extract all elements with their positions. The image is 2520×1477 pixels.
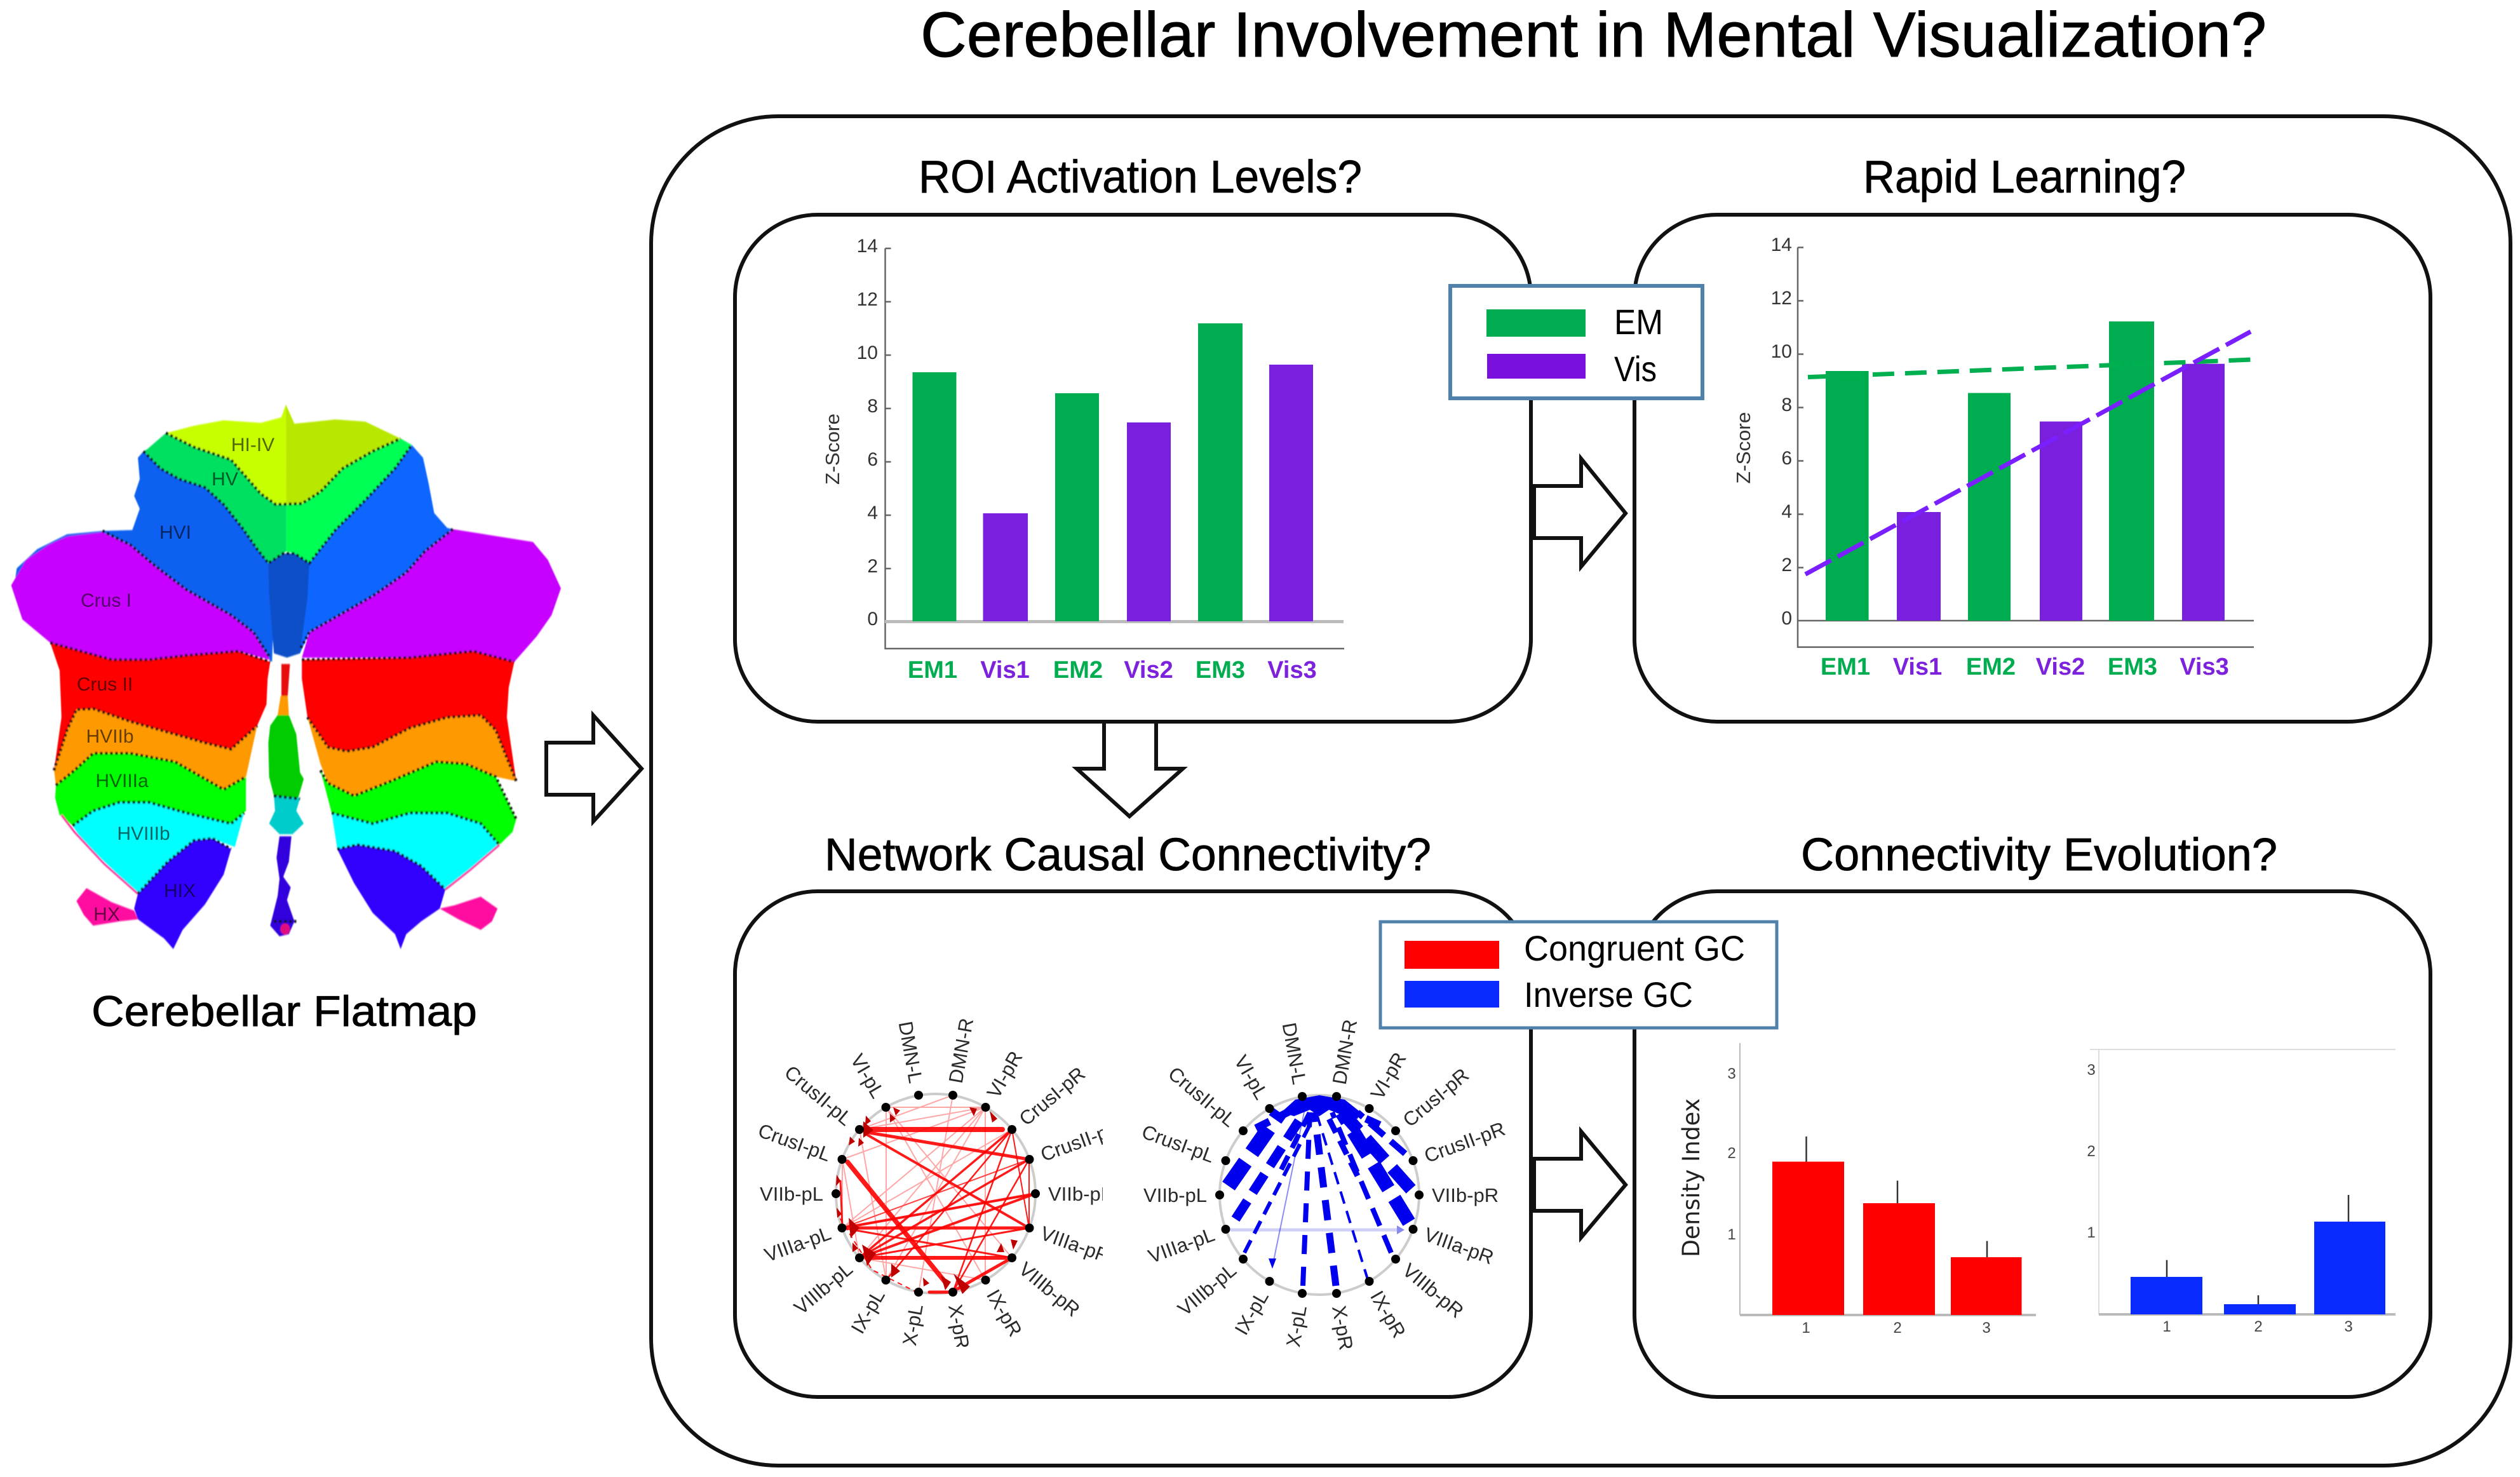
bar chart: congruent density index: 3 bbox=[1727, 1065, 1736, 1082]
bar chart: congruent density index: 1 bbox=[1802, 1319, 1810, 1337]
bar chart: ROI activation z-scores: 2 bbox=[867, 556, 878, 577]
arrow: flatmap to panels bbox=[546, 715, 642, 821]
ring labels: inverse GC: VI-pR bbox=[1366, 1049, 1411, 1103]
lobule HVIIIb bbox=[72, 802, 499, 894]
ring labels: congruent GC: IX-pL bbox=[847, 1286, 889, 1337]
lobule HVIIIa bbox=[55, 753, 516, 845]
pink lobule fringe bbox=[62, 815, 499, 894]
bar chart with trend lines: 12 bbox=[1771, 288, 1792, 309]
arrow: network to evolution bbox=[1534, 1131, 1626, 1238]
lobule HI-IV bbox=[166, 405, 401, 504]
vermis: central blue bbox=[268, 553, 309, 658]
flatmap labels: Crus II bbox=[77, 674, 133, 695]
bar chart with trend lines: 6 bbox=[1781, 448, 1792, 469]
panel: connectivity evolution bbox=[1634, 830, 2430, 1397]
ring labels: congruent GC: DMN-L bbox=[894, 1020, 927, 1085]
bar chart with trend lines: Vis3 bbox=[2180, 654, 2229, 680]
ring labels: congruent GC: VI-pR bbox=[983, 1048, 1027, 1102]
bar chart with trend lines: EM1 bbox=[1821, 654, 1870, 680]
bar chart: ROI activation z-scores: 4 bbox=[867, 502, 878, 523]
bar chart with trend lines bbox=[1732, 234, 2254, 680]
ring labels: congruent GC: CrusI-pR bbox=[1015, 1062, 1089, 1130]
bar chart with trend lines: 8 bbox=[1781, 395, 1792, 415]
bar chart: ROI activation z-scores: 0 bbox=[867, 609, 878, 630]
arrow: ROI to rapid learning bbox=[1534, 459, 1626, 567]
ring labels: inverse GC: DMN-R bbox=[1328, 1018, 1361, 1086]
bar chart: inverse density index: 1 bbox=[2162, 1318, 2171, 1335]
bar chart: ROI activation z-scores: Vis3 bbox=[1267, 657, 1317, 684]
lobule Crus II bbox=[50, 643, 516, 781]
bar chart: congruent density index: 1 bbox=[1727, 1226, 1736, 1243]
flatmap labels: HVIIIb bbox=[117, 823, 170, 844]
heading: ROI activation levels: ROI Activation Levels? bbox=[919, 152, 1362, 203]
legend: EM / Vis: EM bbox=[1614, 302, 1663, 342]
dotted lobule boundaries bbox=[50, 433, 516, 921]
ring nodes: inverse GC bbox=[1215, 1092, 1424, 1298]
ring labels: congruent GC: CrusII-pL bbox=[780, 1061, 856, 1130]
ring labels: inverse GC: IX-pL bbox=[1230, 1287, 1273, 1339]
panel: outer container bbox=[651, 116, 2510, 1466]
bar chart: inverse density index: 2 bbox=[2087, 1143, 2096, 1160]
bar chart: inverse density index: 3 bbox=[2087, 1062, 2096, 1079]
chart: congruent GC connectivity ring bbox=[755, 1016, 1124, 1351]
trend line: EM bbox=[1808, 360, 2253, 377]
bar chart with trend lines: Vis1 bbox=[1893, 654, 1942, 680]
bar chart with trend lines: 10 bbox=[1771, 341, 1792, 362]
ring labels: inverse GC: VIIb-pR bbox=[1432, 1184, 1499, 1206]
lobule HVI fringe and hemispheres bbox=[15, 445, 453, 662]
bar chart: ROI activation z-scores: 12 bbox=[857, 289, 878, 310]
heading: connectivity evolution: Connectivity Evolution? bbox=[1801, 830, 2277, 880]
bar chart: ROI activation z-scores: 8 bbox=[867, 396, 878, 417]
legend: congruent / inverse GC bbox=[1380, 922, 1777, 1028]
legend: congruent / inverse GC: Inverse GC bbox=[1524, 975, 1693, 1015]
vermis segments bbox=[268, 664, 304, 936]
bar chart with trend lines: 0 bbox=[1781, 608, 1792, 629]
caption: cerebellar flatmap: Cerebellar Flatmap bbox=[91, 987, 477, 1035]
bar chart: inverse density index: 3 bbox=[2344, 1318, 2353, 1335]
heading: network causal connectivity: Network Causal Connectivity? bbox=[825, 830, 1431, 880]
bar chart: ROI activation z-scores bbox=[821, 236, 1344, 684]
ring labels: inverse GC: CrusII-pR bbox=[1421, 1117, 1508, 1167]
chart: inverse GC connectivity ring bbox=[1139, 1018, 1508, 1352]
bar chart: congruent density index: 2 bbox=[1727, 1145, 1736, 1162]
ring labels: congruent GC: X-pR bbox=[944, 1302, 974, 1351]
bar chart: ROI activation z-scores: 10 bbox=[857, 342, 878, 363]
bar chart: ROI activation z-scores: EM2 bbox=[1053, 657, 1103, 684]
ring labels: inverse GC: CrusII-pL bbox=[1164, 1062, 1240, 1131]
flatmap labels bbox=[77, 435, 274, 925]
ring labels: congruent GC: CrusI-pL bbox=[755, 1119, 834, 1166]
ring labels: congruent GC: DMN-R bbox=[945, 1016, 978, 1085]
legend: EM / Vis: Vis bbox=[1614, 349, 1657, 389]
arrowheads: congruent GC bbox=[836, 1107, 1018, 1294]
ring labels: congruent GC bbox=[755, 1016, 1124, 1351]
bar chart with trend lines: Z-Score bbox=[1732, 412, 1755, 484]
bar chart: inverse density index bbox=[2087, 1049, 2395, 1335]
flatmap labels: HVIIIa bbox=[95, 771, 149, 792]
trend line: Vis bbox=[1805, 332, 2251, 574]
bar chart: congruent density index: 3 bbox=[1982, 1319, 1991, 1337]
lobule HVIIb bbox=[54, 709, 516, 796]
flatmap labels: HV bbox=[212, 469, 238, 490]
lobule HX bbox=[76, 888, 497, 930]
bar chart: congruent density index: Density Index bbox=[1678, 1098, 1705, 1257]
bar chart with trend lines: 14 bbox=[1771, 234, 1792, 255]
panel: rapid learning bbox=[1634, 152, 2430, 722]
heading: rapid learning: Rapid Learning? bbox=[1863, 152, 2186, 203]
ring labels: congruent GC: VIIIa-pR bbox=[1037, 1222, 1113, 1267]
flatmap labels: HIX bbox=[164, 880, 196, 901]
ring nodes: congruent GC bbox=[832, 1091, 1040, 1297]
title: Cerebellar Involvement in Mental Visualization? bbox=[920, 0, 2267, 71]
flatmap labels: HI-IV bbox=[231, 435, 274, 455]
ring labels: inverse GC: X-pL bbox=[1282, 1304, 1311, 1349]
ring labels: congruent GC: VIIb-pL bbox=[760, 1183, 823, 1205]
bar chart: inverse density index: 2 bbox=[2254, 1318, 2263, 1335]
ring labels: inverse GC: VIIb-pL bbox=[1143, 1184, 1207, 1206]
bar chart: ROI activation z-scores: Vis1 bbox=[980, 657, 1030, 684]
ring labels: congruent GC: VIIIb-pR bbox=[1014, 1258, 1084, 1321]
bar chart with trend lines: 4 bbox=[1781, 501, 1792, 522]
ring labels: inverse GC: DMN-L bbox=[1278, 1021, 1311, 1086]
ring labels: congruent GC: VIIb-pR bbox=[1048, 1183, 1115, 1205]
flatmap labels: Crus I bbox=[81, 590, 131, 611]
ring labels: inverse GC: X-pR bbox=[1328, 1304, 1358, 1352]
ring labels: congruent GC: CrusII-pR bbox=[1037, 1116, 1124, 1166]
lobule Crus I bbox=[11, 529, 561, 662]
ring labels: inverse GC: VIIIb-pR bbox=[1398, 1259, 1468, 1323]
bar chart: ROI activation z-scores: 6 bbox=[867, 449, 878, 470]
flatmap: cerebellar lobules bbox=[11, 405, 561, 949]
ring labels: inverse GC: VIIIa-pR bbox=[1421, 1223, 1497, 1269]
bar chart: ROI activation z-scores: Vis2 bbox=[1124, 657, 1173, 684]
bar chart: inverse density index: 1 bbox=[2087, 1224, 2096, 1241]
panel: network causal connectivity bbox=[735, 830, 1531, 1397]
ring labels: inverse GC: IX-pR bbox=[1366, 1287, 1410, 1342]
panel: ROI activation levels bbox=[735, 152, 1531, 722]
bar chart: congruent density index: 2 bbox=[1893, 1319, 1902, 1337]
flatmap labels: HVIIb bbox=[86, 726, 134, 747]
ring labels: inverse GC: CrusI-pL bbox=[1139, 1121, 1218, 1167]
ring labels: congruent GC: X-pL bbox=[898, 1302, 927, 1347]
ring labels: congruent GC: VIIIb-pL bbox=[790, 1258, 857, 1319]
bar chart: congruent density index bbox=[1678, 1043, 2036, 1337]
bar chart: ROI activation z-scores: 14 bbox=[857, 236, 878, 257]
ring labels: inverse GC: VIIIb-pL bbox=[1173, 1259, 1241, 1320]
bar chart with trend lines: EM2 bbox=[1966, 654, 2016, 680]
ring labels: inverse GC: VI-pL bbox=[1230, 1051, 1272, 1103]
bar chart with trend lines: Vis2 bbox=[2036, 654, 2085, 680]
bar chart: ROI activation z-scores: EM3 bbox=[1196, 657, 1245, 684]
lobule HV bbox=[144, 433, 412, 563]
ring labels: congruent GC: VIIIa-pL bbox=[762, 1222, 834, 1266]
ring labels: congruent GC: VI-pL bbox=[846, 1050, 889, 1102]
ring labels: congruent GC: IX-pR bbox=[982, 1286, 1027, 1340]
legend: EM / Vis bbox=[1450, 286, 1702, 398]
legend: congruent / inverse GC: Congruent GC bbox=[1524, 928, 1745, 968]
bar chart: ROI activation z-scores: EM1 bbox=[908, 657, 957, 684]
bar chart with trend lines: 2 bbox=[1781, 555, 1792, 576]
lobule HIX bbox=[134, 839, 445, 949]
arrow: ROI to network bbox=[1077, 722, 1183, 816]
flatmap labels: HX bbox=[93, 904, 120, 925]
ring labels: inverse GC: CrusI-pR bbox=[1399, 1063, 1473, 1131]
flatmap labels: HVI bbox=[159, 522, 191, 543]
ring labels: inverse GC bbox=[1139, 1018, 1508, 1352]
ring labels: inverse GC: VIIIa-pL bbox=[1145, 1223, 1218, 1267]
bar chart with trend lines: EM3 bbox=[2108, 654, 2157, 680]
bar chart: ROI activation z-scores: Z-Score bbox=[821, 414, 844, 485]
